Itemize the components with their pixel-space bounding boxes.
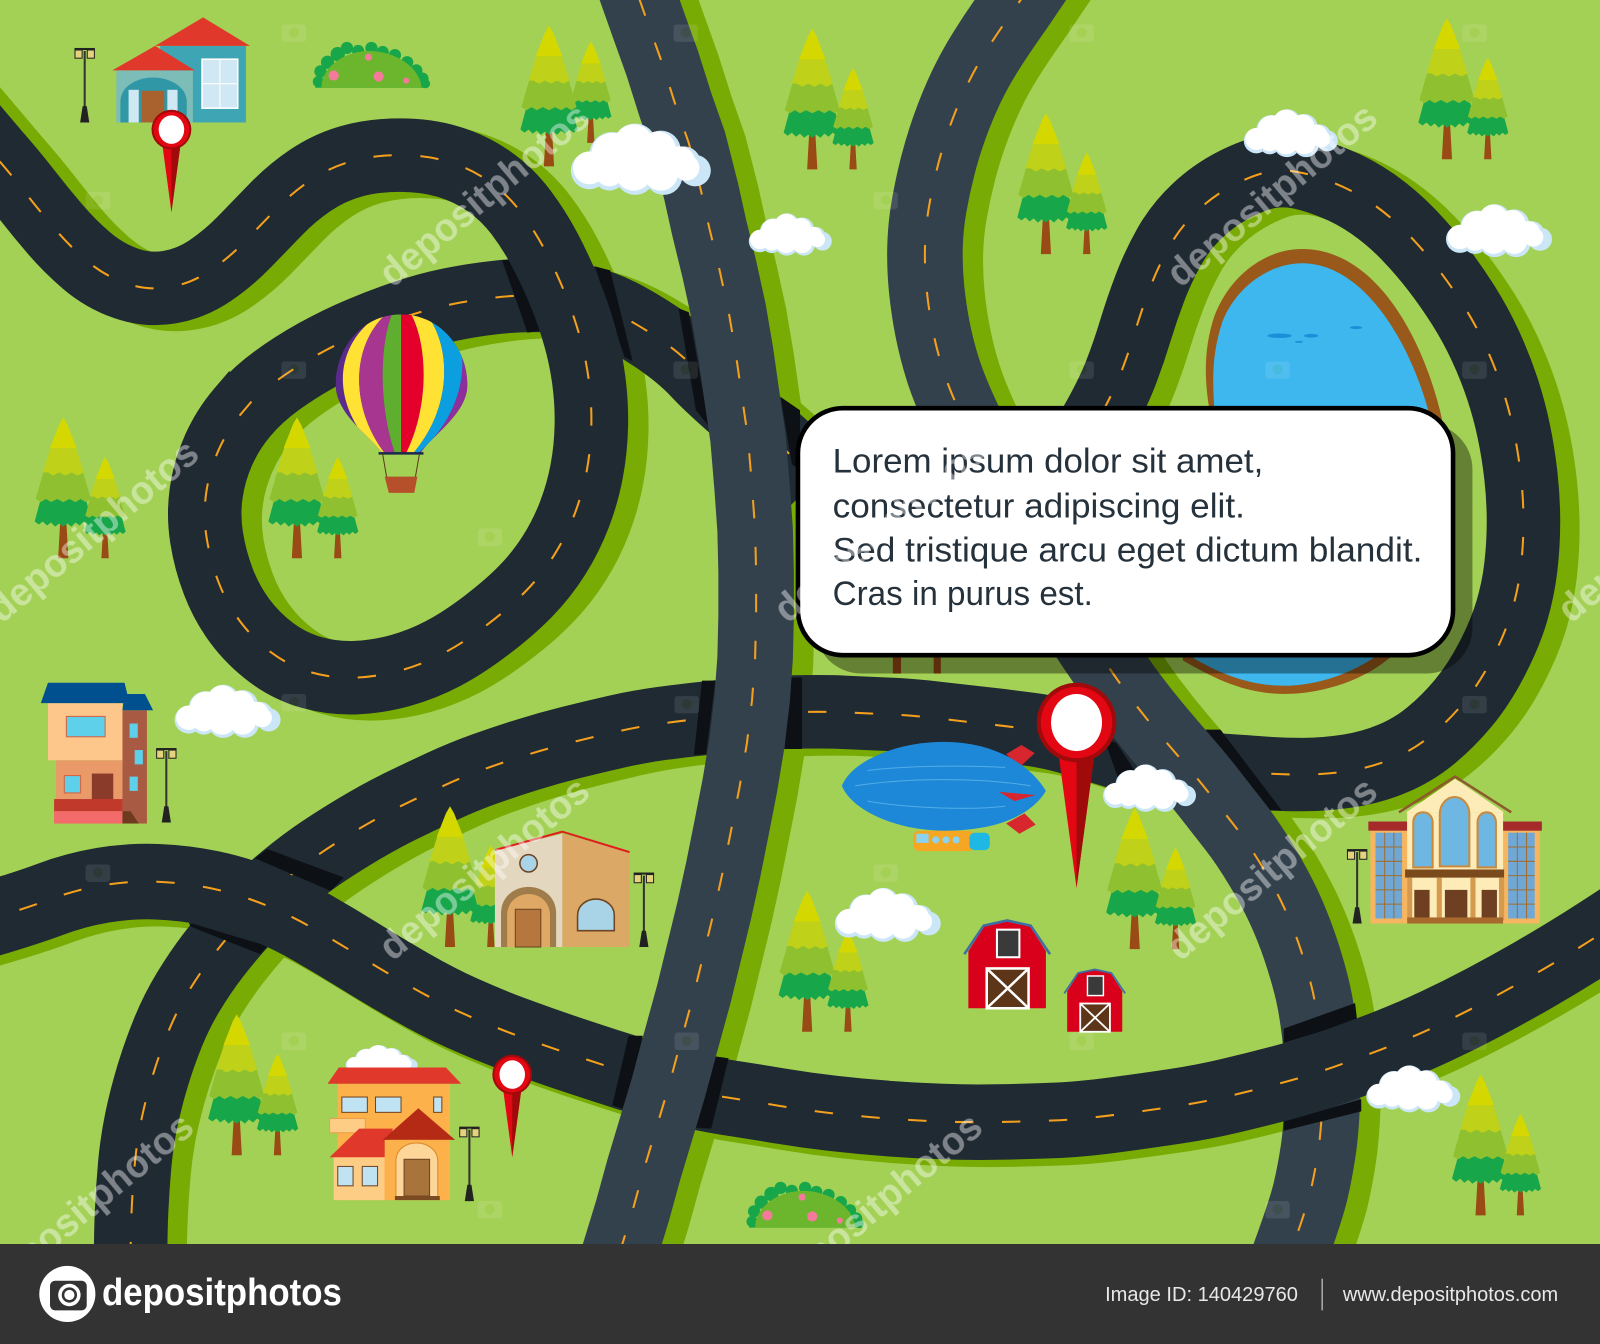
callout text: Sed tristique arcu eget dictum blandit.	[833, 531, 1422, 569]
crossing shadows on grey right road	[1284, 1003, 1361, 1131]
house: large building right	[1368, 777, 1542, 924]
house: teal top-left	[112, 17, 250, 122]
watermarks: depositphotos: depositphotos	[1159, 95, 1386, 296]
hidden tree trunks below callout	[893, 653, 941, 674]
trees: beside tan house	[421, 806, 511, 947]
pin: top-left	[152, 110, 191, 212]
trees: beside barns	[779, 891, 869, 1032]
hot air balloon	[332, 311, 474, 493]
trees: top centre-left	[520, 26, 611, 166]
callout text: Cras in purus est.	[833, 575, 1093, 613]
trees: under blimp	[1106, 808, 1196, 949]
callout text: consectetur adipiscing elit.	[833, 487, 1245, 525]
road: winding loop upper pass	[0, 90, 591, 678]
road: grey right road	[925, 0, 1323, 1260]
house: tan centre	[495, 832, 630, 947]
road: grey central road	[617, 0, 756, 1260]
trees: bottom right	[1452, 1075, 1541, 1215]
watermark camera marks	[86, 24, 1487, 1218]
pin: bottom-centre	[492, 1055, 532, 1157]
footer image id: Image ID: 140429760	[1105, 1284, 1298, 1306]
trees: top right	[1418, 18, 1508, 159]
road crossing shadows on loop	[502, 259, 800, 469]
footer bar	[0, 1244, 1600, 1344]
clouds	[175, 109, 1552, 1112]
bush: bottom	[746, 1182, 864, 1228]
footer logo icon	[39, 1266, 95, 1322]
watermarks: depositphotos: depositphotos	[371, 769, 598, 969]
watermarks: depositphotos: depositphotos	[764, 1105, 991, 1305]
crossing shadows on arc road	[189, 678, 1282, 954]
trees: bottom left	[208, 1014, 298, 1155]
bush: top	[313, 42, 430, 88]
road: long arc across the map	[131, 171, 1523, 1260]
road: loop lower pass	[218, 295, 816, 480]
watermarks: depositphotos: depositphotos	[1159, 769, 1386, 969]
trees: upper right	[1017, 113, 1107, 254]
barn: large	[964, 920, 1050, 1008]
cloud: behind orange house	[346, 1045, 418, 1076]
callout text: Lorem ipsum dolor sit amet,	[833, 442, 1263, 480]
trees: inside loop	[268, 417, 358, 558]
callout text	[833, 442, 1422, 613]
road: long bottom road	[0, 882, 1600, 1122]
trees: left group	[35, 417, 126, 558]
watermarks: depositphotos: depositphotos	[766, 431, 993, 631]
watermarks: depositphotos: depositphotos	[371, 95, 598, 296]
pin: large	[1037, 683, 1116, 888]
lake	[1183, 249, 1447, 694]
crossing shadows on bottom road	[612, 1036, 729, 1129]
barn: small	[1064, 969, 1125, 1032]
lamp posts	[74, 48, 1367, 1201]
callout shadow	[815, 424, 1472, 674]
house: orange bottom	[328, 1067, 461, 1200]
blimp	[842, 742, 1046, 851]
house: orange three-storey left	[41, 683, 153, 824]
footer url: www.depositphotos.com	[1342, 1284, 1558, 1306]
trees: top centre	[784, 29, 874, 169]
footer wordmark: depositphotos	[102, 1271, 342, 1313]
callout	[798, 408, 1453, 655]
